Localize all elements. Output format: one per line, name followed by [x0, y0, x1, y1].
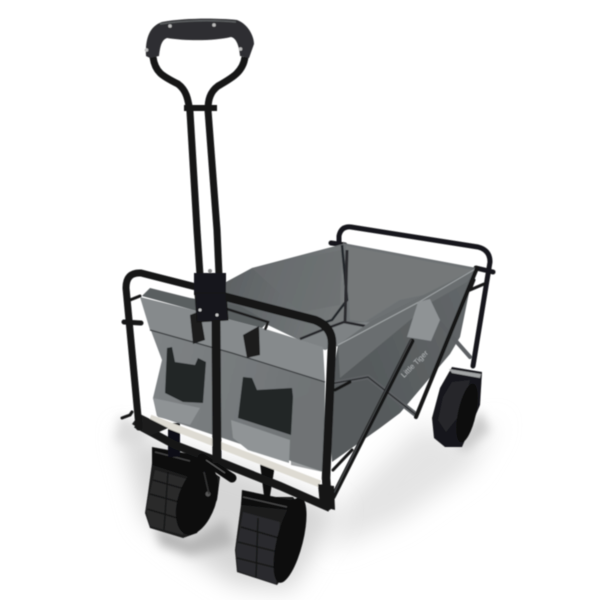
side panel fabric with logo [328, 268, 477, 462]
front fabric panel with pockets [150, 328, 325, 472]
front tubular frame [122, 273, 350, 506]
mesh pocket left [165, 347, 206, 403]
wagon interior fabric [226, 243, 477, 350]
wagon body group [122, 19, 493, 586]
telescoping handle pole [153, 57, 245, 463]
diagonal side legs [333, 268, 484, 497]
far right wheel [432, 367, 482, 447]
ground shadows [115, 410, 500, 590]
handle grip [145, 19, 254, 58]
fabric top cuff and straps [140, 288, 325, 382]
side cup pouch [407, 299, 440, 341]
side panel cross braces [330, 323, 470, 414]
front left wheel [145, 423, 226, 540]
mesh pocket right [238, 377, 293, 435]
logo text: Little Tiger [399, 348, 430, 379]
front right wheel [235, 463, 313, 586]
far frame with rail and leg [331, 227, 493, 366]
lower cross bar and chassis [132, 414, 335, 510]
